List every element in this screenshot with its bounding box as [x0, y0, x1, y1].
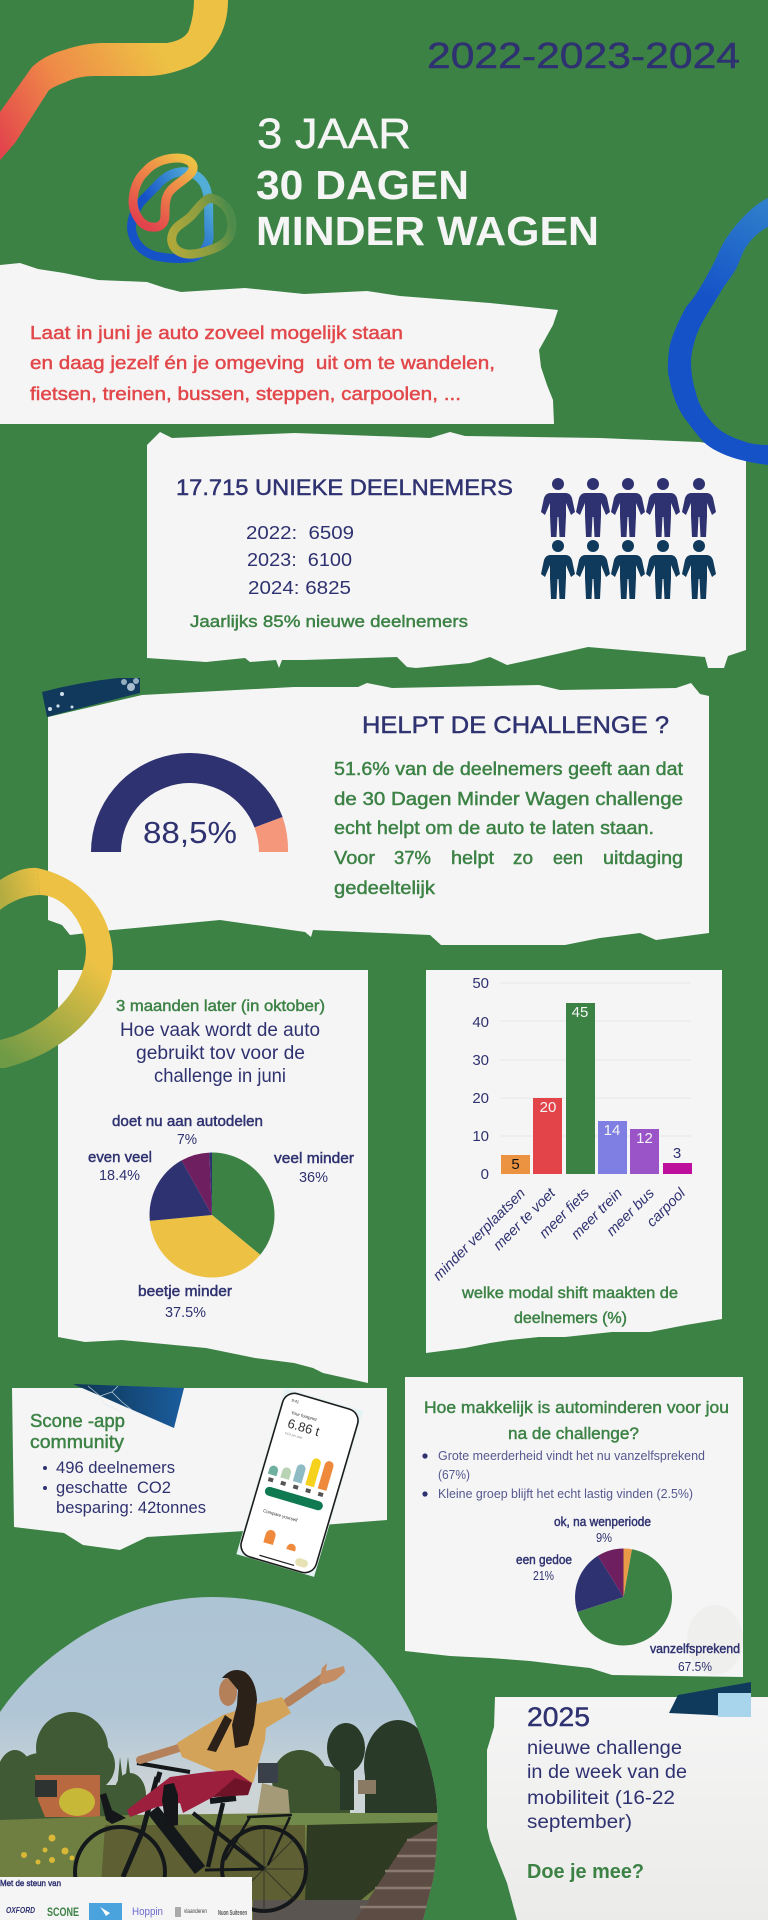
sponsors heading: Met de steun van	[0, 1878, 61, 1888]
chart caption: deelnemers (%)	[514, 1310, 627, 1327]
pie labels: doet nu aan autodelen	[112, 1114, 263, 1130]
bar chart: 20	[472, 1090, 489, 1107]
text block: helpt: gedeeltelijk	[334, 878, 436, 898]
year: 2025	[527, 1702, 590, 1732]
sponsor logos	[6, 1903, 247, 1920]
pie chart: autogebruik	[150, 1152, 275, 1277]
title: MINDER WAGEN	[256, 208, 599, 254]
text block: helpt: een	[553, 848, 583, 868]
pie labels: 67.5%	[678, 1659, 712, 1674]
panel: autominderen	[405, 1377, 743, 1677]
panel: auto gebruik	[58, 970, 368, 1383]
yearly numbers: 2023: 6100	[247, 550, 352, 570]
text block: helpt: uitdaging	[603, 848, 683, 868]
chart caption	[461, 1285, 678, 1327]
meadow	[0, 1813, 440, 1920]
building and reeds	[258, 1763, 278, 1783]
bar chart: meer trein	[568, 1186, 626, 1243]
bar chart: meer te voet	[491, 1185, 560, 1254]
pie labels: beetje minder	[138, 1284, 232, 1300]
photo: cyclist in landscape	[0, 1590, 445, 1920]
heading: scone: community	[30, 1432, 124, 1452]
text block: nieuwe challenge: nieuwe challenge	[527, 1737, 682, 1759]
ribbon: blue right	[668, 198, 768, 465]
pie labels: 37.5%	[165, 1305, 206, 1321]
house	[35, 1775, 100, 1817]
bar chart: 20	[540, 1099, 556, 1116]
ribbon: top left	[0, 0, 228, 160]
bar chart: carpool	[644, 1185, 689, 1230]
sponsor logos: OXFORD	[6, 1905, 35, 1915]
question text: Hoe vaak wordt de auto	[120, 1020, 320, 1041]
pie chart: makkelijk	[575, 1548, 672, 1645]
text block: nieuwe challenge: in de week van de	[527, 1761, 687, 1783]
pie labels: een gedoe	[516, 1552, 572, 1567]
cyclist person	[100, 1663, 345, 1827]
text block: helpt: echt helpt om de auto te laten staan.	[334, 818, 654, 838]
text block: helpt: zo	[513, 848, 533, 868]
heading: scone: Scone -app	[30, 1411, 125, 1431]
bar chart: 10	[472, 1128, 489, 1145]
question text	[120, 1020, 320, 1087]
pie labels: 9%	[596, 1530, 612, 1545]
background trees	[0, 1712, 440, 1820]
bar chart: meer fiets	[536, 1186, 593, 1242]
bar chart: 40	[472, 1014, 489, 1031]
torn strip	[42, 678, 140, 717]
phone mockup	[236, 1388, 363, 1577]
call to action: Doe je mee?	[527, 1861, 644, 1883]
icon: logo loops	[132, 158, 232, 259]
subheading: 3 maanden later: 3 maanden later (in oktober)	[116, 998, 325, 1015]
new participants note: Jaarlijks 85% nieuwe deelnemers	[190, 612, 468, 631]
gauge chart: 88,5%	[143, 815, 237, 850]
bar chart: 3	[673, 1145, 681, 1162]
sponsor logos: SCONE	[47, 1905, 79, 1919]
bullet list: autominderen: (67%)	[438, 1467, 470, 1482]
sponsor logos: Hoppin	[132, 1906, 163, 1918]
panel: intro	[0, 263, 558, 424]
panel: deelnemers	[147, 432, 746, 668]
bar chart: 50	[472, 975, 489, 992]
text block: helpt: helpt	[451, 848, 494, 868]
bar chart: 14	[604, 1122, 620, 1139]
intro text: Laat in juni je auto zoveel mogelijk staan	[30, 322, 403, 343]
pie labels: 18.4%	[99, 1168, 140, 1184]
bicycle	[75, 1763, 306, 1917]
pie labels	[88, 1114, 354, 1321]
panel: modal shift	[426, 970, 722, 1353]
gauge chart	[91, 753, 288, 852]
heading: helpt de challenge: HELPT DE CHALLENGE ?	[362, 712, 669, 739]
intro text: en daag jezelf én je omgeving uit om te wandelen,	[30, 352, 495, 373]
heading: deelnemers: 17.715 UNIEKE DEELNEMERS	[176, 475, 513, 500]
chart caption: welke modal shift maakten de	[461, 1285, 678, 1302]
heading: autominderen	[424, 1398, 729, 1443]
bar chart: 0	[481, 1166, 489, 1183]
icon: people group	[541, 478, 716, 599]
question text: challenge in juni	[154, 1066, 286, 1087]
phone mockup: Compare yourself	[263, 1508, 299, 1523]
heading: scone	[30, 1411, 125, 1452]
bar chart: 12	[636, 1130, 653, 1147]
question text: gebruikt tov voor de	[136, 1043, 305, 1064]
text block: nieuwe challenge	[527, 1737, 687, 1833]
bullet list: autominderen	[422, 1448, 705, 1501]
panel: sponsors	[0, 1877, 252, 1920]
date range: 2022-2023-2024	[427, 35, 740, 76]
sponsor logos: vlaanderen	[184, 1909, 207, 1915]
text block: nieuwe challenge: mobiliteit (16-22	[527, 1787, 675, 1809]
bar chart: 5	[511, 1156, 520, 1173]
phone mockup: Your footprint	[290, 1410, 318, 1422]
pie labels: ok, na wenperiode	[554, 1514, 651, 1529]
pie labels: veel minder	[274, 1151, 354, 1167]
heading: autominderen: Hoe makkelijk is autominderen voor jou	[424, 1398, 729, 1417]
bar chart: meer bus	[604, 1186, 658, 1240]
yearly numbers: 2022: 6509	[246, 523, 354, 543]
text block: helpt: 51.6% van de deelnemers geeft aan dat	[334, 759, 683, 779]
phone mockup: 9:41	[291, 1398, 301, 1405]
panel: 2025	[487, 1682, 768, 1920]
heading: autominderen: na de challenge?	[508, 1424, 639, 1443]
phone mockup: 6.86 t	[286, 1416, 322, 1439]
bullet list: scone: geschatte CO2	[56, 1479, 171, 1497]
bar chart	[430, 975, 692, 1284]
bar chart: minder verplaatsen	[430, 1186, 529, 1284]
text block: helpt	[334, 759, 683, 898]
bullet list: autominderen: Kleine groep blijft het echt lastig vinden (2.5%)	[438, 1486, 693, 1501]
title: 30 DAGEN	[256, 162, 469, 208]
text block: helpt: Voor	[334, 848, 375, 868]
bar chart: 30	[472, 1052, 489, 1069]
yearly numbers	[246, 523, 354, 598]
pie labels: vanzelfsprekend	[650, 1641, 740, 1656]
pie labels: 21%	[533, 1568, 554, 1583]
sponsor logos: Nuon Suitenen	[218, 1910, 247, 1917]
bar chart: 45	[572, 1004, 588, 1021]
bullet list: scone: besparing: 42tonnes	[56, 1499, 206, 1517]
text block: helpt: 37%	[394, 848, 431, 868]
pie labels	[516, 1514, 740, 1674]
boardwalk	[253, 1823, 440, 1920]
phone mockup: CO2 per year	[284, 1431, 303, 1440]
bullet list: scone	[43, 1459, 206, 1517]
panel: helpt de challenge	[42, 678, 709, 945]
ribbon: yellow ring	[0, 868, 113, 1068]
intro text: fietsen, treinen, bussen, steppen, carpoolen, ...	[30, 383, 461, 404]
text block: nieuwe challenge: september)	[527, 1811, 632, 1833]
pie labels: 7%	[177, 1132, 197, 1148]
text block: helpt: de 30 Dagen Minder Wagen challenge	[334, 789, 683, 809]
pie labels: even veel	[88, 1150, 152, 1166]
torn strip	[669, 1682, 751, 1717]
intro text	[30, 322, 495, 404]
torn triangle	[73, 1384, 184, 1428]
panel: scone app	[12, 1384, 387, 1577]
bullet list: scone: 496 deelnemers	[56, 1459, 175, 1477]
yearly numbers: 2024: 6825	[248, 578, 351, 598]
bullet list: autominderen: Grote meerderheid vindt het nu vanzelfsprekend	[438, 1448, 705, 1463]
title	[256, 110, 599, 254]
pie labels: 36%	[299, 1170, 328, 1186]
flowers	[21, 1834, 74, 1864]
title: 3 JAAR	[257, 110, 411, 158]
